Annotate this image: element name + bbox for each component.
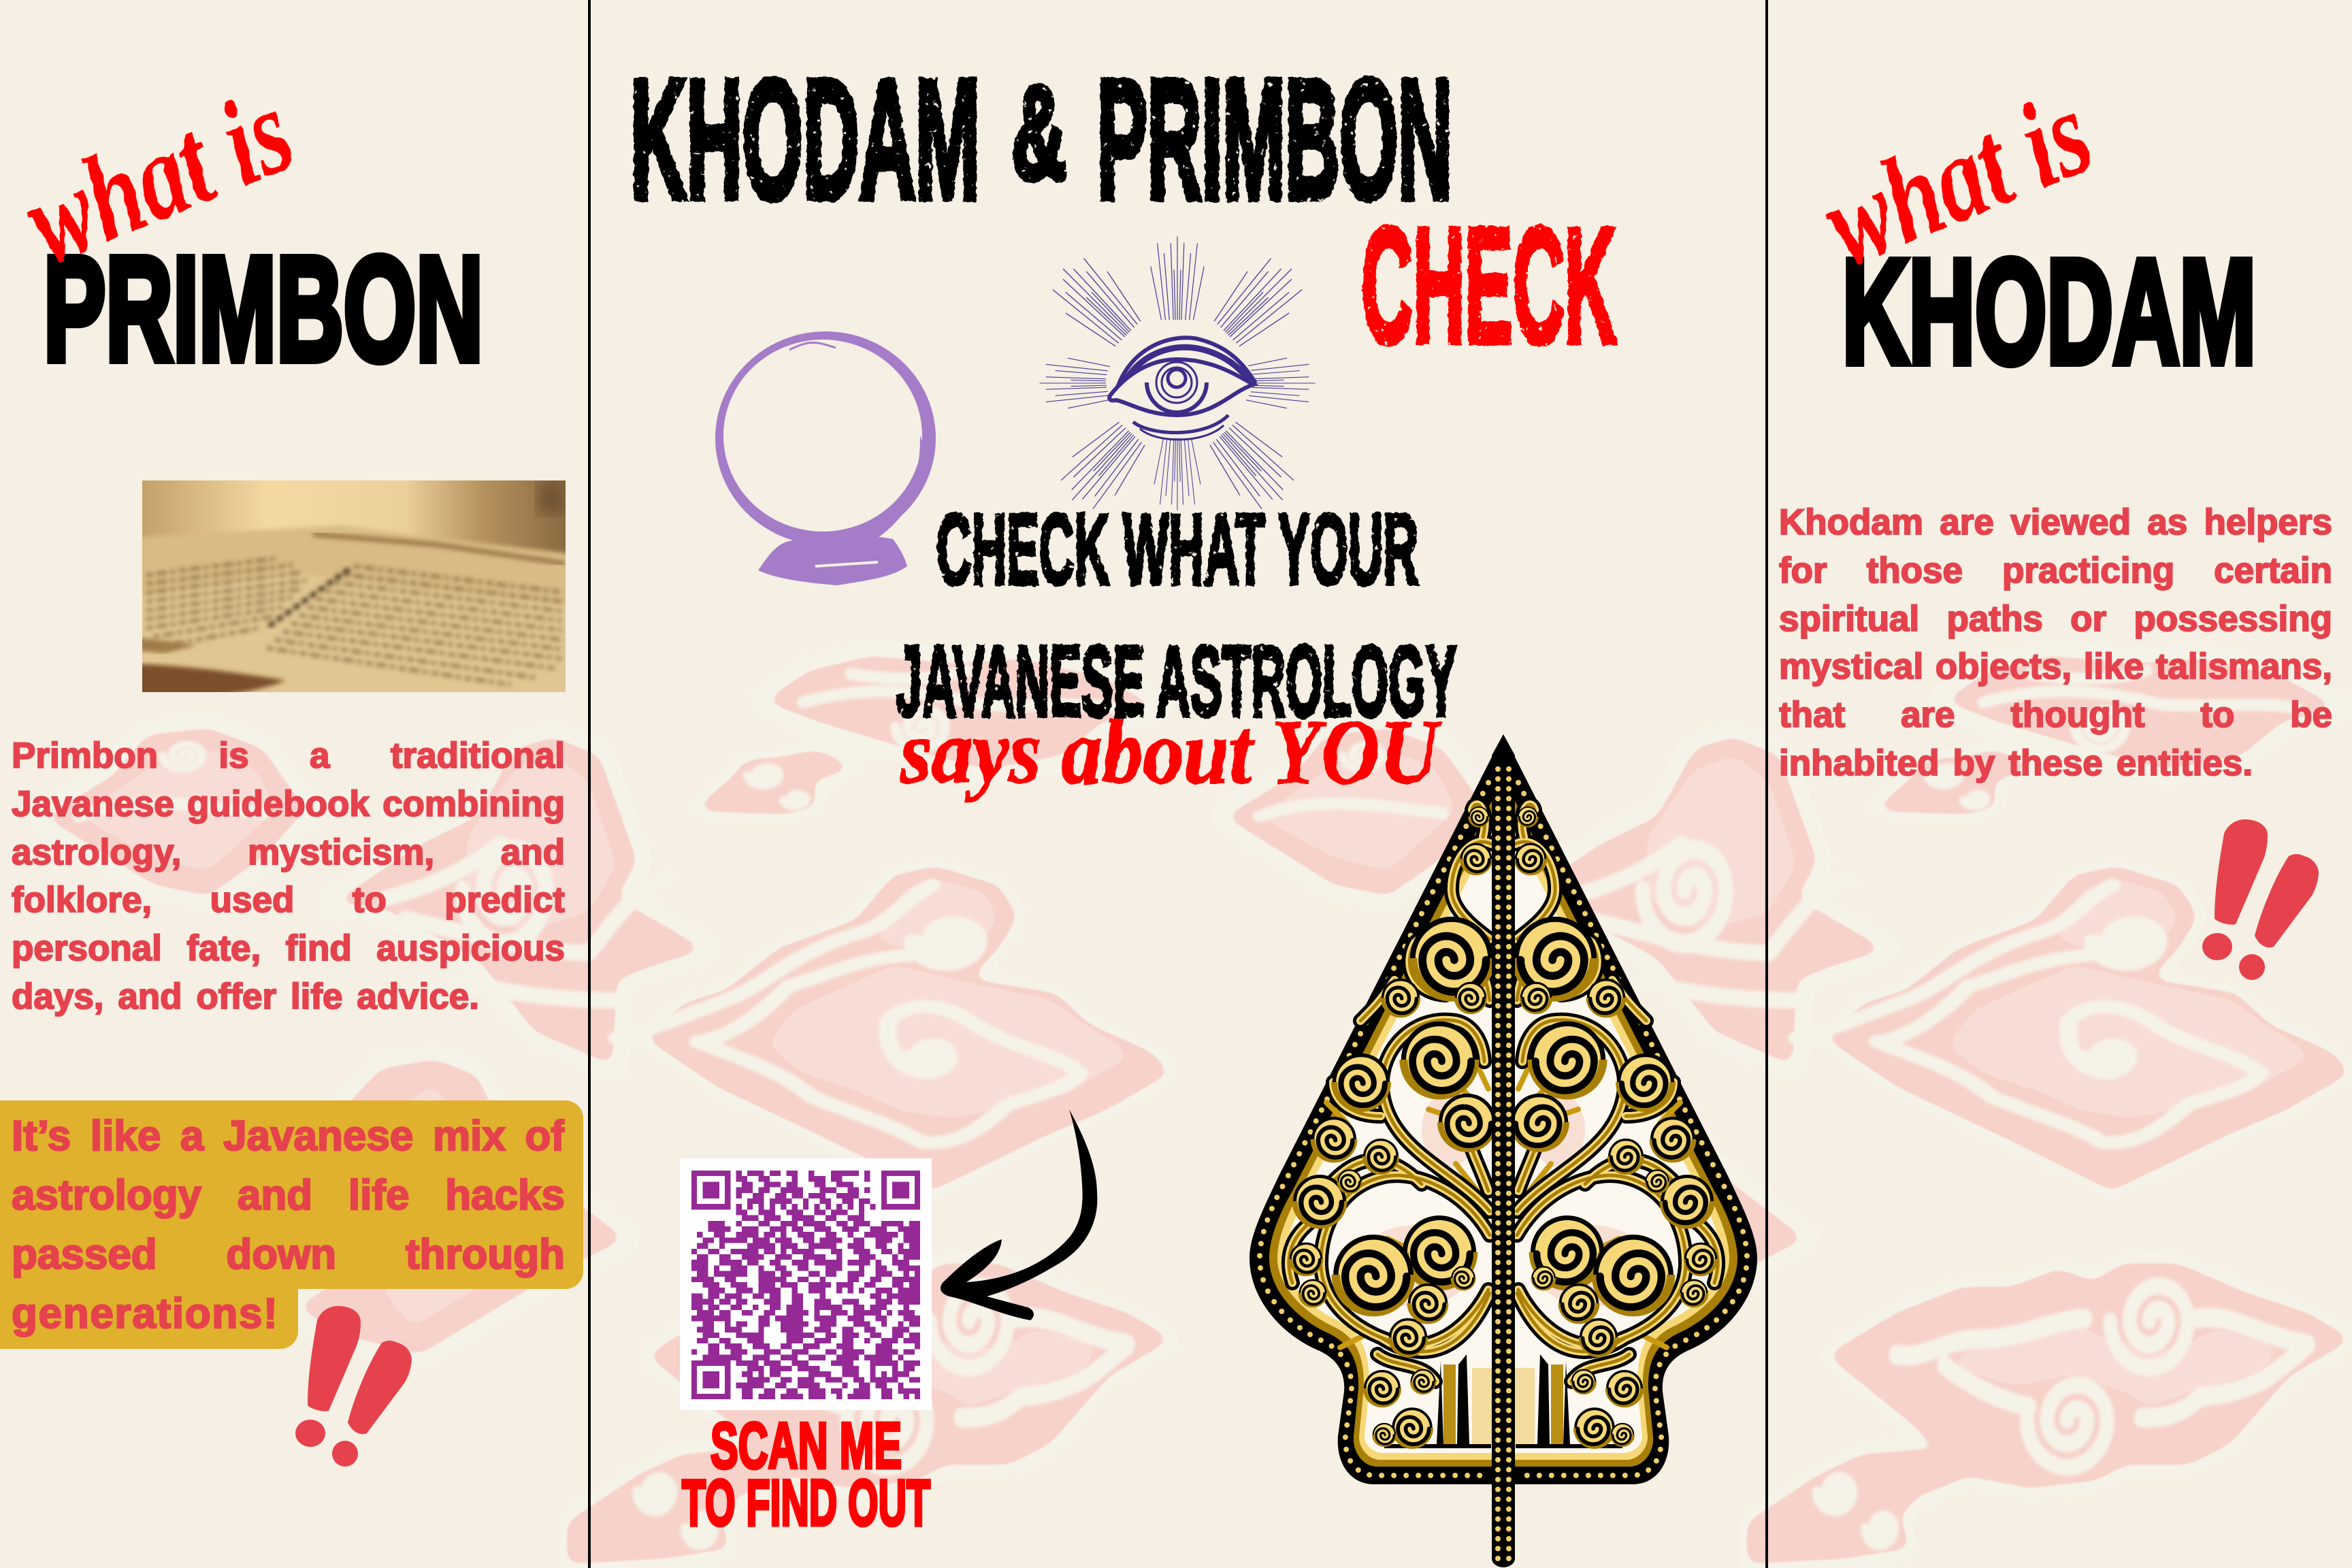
caption: SCAN ME: SCAN ME <box>710 1409 902 1482</box>
text block: khodam description: Khodam are viewed as helpers <box>1779 502 2332 542</box>
callout text: astrology and life hacks <box>12 1172 565 1219</box>
text block: primbon description <box>12 736 565 1017</box>
callout: javanese mix <box>0 1100 583 1349</box>
text block: primbon description: folklore, used to predict <box>12 880 565 920</box>
callout text: It’s like a Javanese mix of <box>12 1113 565 1160</box>
text: CHECK WHAT YOUR <box>936 493 1418 606</box>
title: KHODAM & PRIMBON: KHODAM <box>630 44 980 234</box>
text block: primbon description: Primbon is a traditional <box>12 736 565 776</box>
text block: primbon description: personal fate, find auspicious <box>12 928 565 968</box>
heading: PRIMBON: PRIMBON <box>44 227 483 392</box>
QR code <box>680 1158 932 1410</box>
text block: khodam description: that are thought to be <box>1779 695 2332 735</box>
text block: primbon description: days, and offer life advice. <box>12 977 479 1017</box>
text block: khodam description: for those practicing certain <box>1779 551 2332 591</box>
icon: crystal ball <box>715 331 936 585</box>
callout text: generations! <box>12 1290 278 1337</box>
panel dividers <box>588 0 1768 1568</box>
text block: primbon description: astrology, mysticism, and <box>12 832 565 872</box>
text block: khodam description: inhabited by these entities. <box>1779 743 2253 783</box>
script heading: what is (left): what is <box>7 62 310 291</box>
title: KHODAM & PRIMBON: & <box>1012 59 1066 207</box>
illustration: wayang gunungan <box>1250 734 1757 1567</box>
callout text <box>12 1113 565 1338</box>
text block: khodam description: spiritual paths or possessing <box>1779 599 2332 639</box>
text block: khodam description: mystical objects, like talismans, <box>1779 647 2332 687</box>
text block: khodam description <box>1779 502 2332 783</box>
icon: exclamation marks (left) <box>295 1306 412 1467</box>
caption: TO FIND OUT: TO FIND OUT <box>682 1467 930 1539</box>
photo: old primbon book <box>129 480 578 701</box>
text: CHECK <box>1361 194 1616 378</box>
text block: primbon description: Javanese guidebook combining <box>12 784 565 824</box>
text: JAVANESE ASTROLOGY <box>896 625 1457 738</box>
callout text: passed down through <box>12 1231 565 1278</box>
text: PRIMBON <box>1097 44 1452 234</box>
script heading: what is (right): what is <box>1806 64 2109 293</box>
arrow pointing to QR code <box>941 1109 1097 1320</box>
icon: exclamation marks (right) <box>2202 819 2319 980</box>
icon: all seeing eye with rays <box>1040 236 1315 519</box>
script subheading: says about YOU: says about YOU <box>900 702 1443 803</box>
